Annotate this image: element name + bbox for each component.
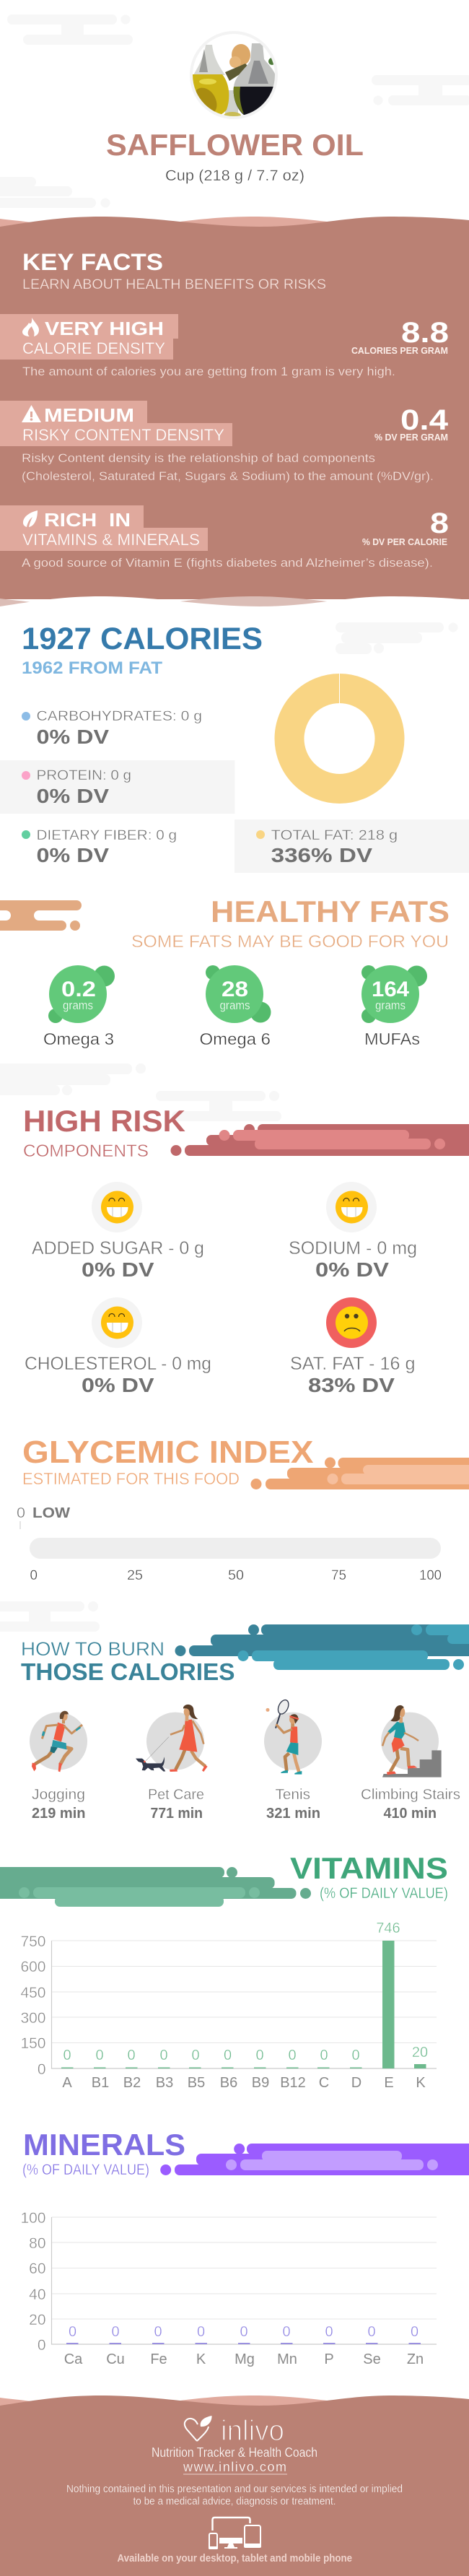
item: sodium: SODIUM - 0 mg xyxy=(289,1238,417,1258)
bar chart: vitamins: B6 xyxy=(220,2075,237,2091)
bar chart: vitamins: B3 xyxy=(156,2075,173,2091)
bar chart: vitamins: B1 xyxy=(92,2075,109,2091)
gauge scale: 25 xyxy=(127,1568,143,1583)
fact: vitamins and minerals: A good source of Vitamin E (fights diabetes and Alzheimer’s disease). xyxy=(22,556,433,570)
disclaimer xyxy=(66,2484,403,2507)
panel: healthy fats xyxy=(0,895,450,1048)
gauge scale: 100 xyxy=(419,1568,442,1583)
bar chart: minerals: 0 xyxy=(325,2324,333,2340)
icon: warning triangle xyxy=(22,405,41,422)
decorative streak: orange xyxy=(0,900,82,931)
bar chart: vitamins: 750 xyxy=(20,1933,46,1950)
legend: carbohydrates xyxy=(22,709,202,748)
item: added sugar xyxy=(32,1182,204,1281)
legend bands xyxy=(0,760,469,873)
marker: value 0 low: LOW xyxy=(32,1505,70,1521)
panel: footer xyxy=(0,2396,469,2576)
fact: vitamins and minerals xyxy=(0,505,449,570)
subheading: daily value: (% OF DAILY VALUE) xyxy=(22,2162,149,2178)
legend: total fat: 336% DV xyxy=(271,844,372,866)
background clouds xyxy=(0,14,469,1632)
bar chart: minerals: Ca xyxy=(64,2351,83,2367)
fact: risky content density: RISKY CONTENT DENSITY xyxy=(22,426,224,444)
bar chart: vitamins: C xyxy=(319,2075,329,2091)
bar chart: vitamins: B5 xyxy=(188,2075,205,2091)
bar chart: vitamins: K xyxy=(416,2075,426,2091)
bubble: omega 6: Omega 6 xyxy=(199,1030,271,1048)
bar chart: minerals: 0 xyxy=(38,2337,46,2354)
bar chart: minerals: 60 xyxy=(29,2260,46,2277)
fact: vitamins and minerals: 8 xyxy=(430,508,449,539)
disclaimer: to be a medical advice, diagnosis or treatment. xyxy=(133,2496,336,2507)
disclaimer: Nothing contained in this presentation and our services is intended or implied xyxy=(66,2484,403,2495)
heading: those calories: THOSE CALORIES xyxy=(21,1658,235,1685)
bar chart: vitamins: 0 xyxy=(127,2048,136,2063)
fact: calorie density: The amount of calories you are getting from 1 gram is very high. xyxy=(22,365,395,378)
legend: protein: PROTEIN: 0 g xyxy=(36,768,131,783)
tagline: Nutrition Tracker & Health Coach xyxy=(152,2445,317,2460)
item: added sugar: 0% DV xyxy=(82,1258,154,1281)
activity: jogging: Jogging xyxy=(32,1787,85,1803)
bar chart: minerals: Se xyxy=(363,2351,381,2367)
fact: calorie density: CALORIES PER GRAM xyxy=(351,346,448,356)
activity: tennis xyxy=(264,1698,322,1822)
decorative streak: red xyxy=(170,1124,469,1156)
bar chart: minerals xyxy=(20,2210,437,2367)
fact: risky content density: 0.4 xyxy=(400,404,449,436)
bar chart: minerals: 20 xyxy=(29,2312,46,2328)
fact: vitamins and minerals: RICH IN xyxy=(44,509,131,531)
marker: value 0 low xyxy=(17,1505,70,1529)
fact: calorie density: CALORIE DENSITY xyxy=(22,339,165,357)
bar chart: vitamins: 300 xyxy=(20,2010,46,2027)
bar chart: minerals: 0 xyxy=(111,2324,120,2340)
bar chart: vitamins: 0 xyxy=(288,2048,297,2063)
bar chart: vitamins: D xyxy=(351,2075,361,2091)
bar chart: vitamins: 0 xyxy=(320,2048,328,2063)
fact: risky content density xyxy=(0,401,449,483)
bar chart: vitamins: 450 xyxy=(20,1985,46,2001)
legend: total fat: TOTAL FAT: 218 g xyxy=(271,828,398,843)
bar chart: vitamins: B9 xyxy=(252,2075,269,2091)
heading: calories: 1927 CALORIES xyxy=(22,622,263,656)
legend: protein: 0% DV xyxy=(36,785,109,807)
subheading: from fat: 1962 FROM FAT xyxy=(22,658,162,678)
bar chart: minerals: 40 xyxy=(29,2286,46,2303)
fact: vitamins and minerals: % DV PER CALORIE xyxy=(362,537,447,547)
panel: glycemic index xyxy=(17,1435,469,1583)
bar chart: minerals: P xyxy=(324,2351,334,2367)
heading: high risk: HIGH RISK xyxy=(23,1104,185,1138)
bar chart: vitamins: 600 xyxy=(20,1959,46,1975)
bar chart: minerals: 0 xyxy=(367,2324,376,2340)
item: saturated fat: 83% DV xyxy=(308,1374,395,1396)
item: sodium: 0% DV xyxy=(315,1258,389,1281)
fact: risky content density: % DV PER GRAM xyxy=(374,432,448,443)
gauge bar xyxy=(30,1538,441,1559)
icon: devices xyxy=(209,2518,261,2549)
activity: climbing stairs xyxy=(361,1705,460,1822)
donut chart xyxy=(289,674,390,788)
panel: high risk components xyxy=(23,1104,469,1396)
item: cholesterol: CHOLESTEROL - 0 mg xyxy=(25,1354,211,1374)
heading: minerals: MINERALS xyxy=(23,2128,185,2162)
icon: tennis player xyxy=(264,1698,322,1775)
activity: pet care: Pet Care xyxy=(148,1787,204,1803)
legend: total fat xyxy=(256,828,398,866)
bar chart: minerals: Zn xyxy=(407,2351,424,2367)
bar chart: minerals: 0 xyxy=(240,2324,248,2340)
bar chart: vitamins: 150 xyxy=(20,2035,46,2052)
marker: value 0 low: 0 xyxy=(17,1505,25,1521)
fact: calorie density: 8.8 xyxy=(401,317,449,349)
bar chart: vitamins: A xyxy=(62,2075,72,2091)
bubble: MUFAs: MUFAs xyxy=(364,1030,420,1048)
activity: jogging: 219 min xyxy=(32,1806,85,1822)
bubble: omega 3: 0.2 xyxy=(61,978,96,1001)
legend: protein xyxy=(22,768,131,807)
item: sodium xyxy=(289,1182,417,1281)
bar chart: vitamins: 0 xyxy=(95,2048,104,2063)
fact: calorie density: VERY HIGH xyxy=(45,318,164,339)
item: added sugar: ADDED SUGAR - 0 g xyxy=(32,1238,204,1258)
panel: calories xyxy=(0,622,469,873)
activity: climbing stairs: Climbing Stairs xyxy=(361,1787,460,1803)
panel: minerals xyxy=(20,2128,469,2367)
activity: pet care xyxy=(136,1705,208,1822)
bubble: omega 3: Omega 3 xyxy=(43,1030,114,1048)
heading: how to burn: HOW TO BURN xyxy=(21,1638,165,1660)
legend: dietary fiber xyxy=(22,828,177,866)
heading: vitamins: VITAMINS xyxy=(290,1851,448,1885)
gauge scale: 0 xyxy=(30,1568,38,1583)
panel: key facts xyxy=(0,217,469,621)
decorative streak: teal xyxy=(175,1624,469,1670)
bar chart: vitamins: 0 xyxy=(191,2048,200,2063)
subheading: estimated: ESTIMATED FOR THIS FOOD xyxy=(22,1469,240,1488)
bubble: MUFAs: 164 xyxy=(372,978,409,1001)
item: saturated fat xyxy=(290,1297,416,1396)
bar chart: vitamins: B2 xyxy=(123,2075,141,2091)
bubble: omega 6: grams xyxy=(219,998,250,1012)
fact: calorie density xyxy=(0,314,449,378)
bar chart: vitamins: 20 xyxy=(412,2045,428,2061)
icon: flame xyxy=(22,318,39,336)
bar chart: minerals: Mg xyxy=(234,2351,255,2367)
bar chart: minerals: Mn xyxy=(277,2351,297,2367)
bar chart: vitamins: 0 xyxy=(224,2048,232,2063)
activity: jogging xyxy=(30,1711,87,1822)
legend: carbohydrates: 0% DV xyxy=(36,726,109,748)
legend: carbohydrates: CARBOHYDRATES: 0 g xyxy=(36,709,202,724)
logo wordmark: inlivo xyxy=(221,2415,284,2447)
bar chart: minerals: 0 xyxy=(154,2324,162,2340)
heading: glycemic index: GLYCEMIC INDEX xyxy=(22,1435,314,1470)
bar chart: minerals: 0 xyxy=(197,2324,205,2340)
fact: risky content density: MEDIUM xyxy=(44,404,134,426)
gauge scale: 75 xyxy=(331,1568,346,1583)
bar chart: minerals: Fe xyxy=(150,2351,167,2367)
subheading: LEARN ABOUT HEALTH BENEFITS OR RISKS xyxy=(22,277,326,292)
bubble: MUFAs: grams xyxy=(375,998,406,1012)
bar chart: minerals: 80 xyxy=(29,2235,46,2252)
bubble: omega 3: grams xyxy=(63,998,93,1012)
title: SAFFLOWER OIL xyxy=(106,128,364,162)
bar chart: vitamins: B12 xyxy=(280,2075,306,2091)
decorative streak: green xyxy=(0,1867,311,1907)
heading: healthy fats: HEALTHY FATS xyxy=(211,895,450,928)
bubble: omega 6: 28 xyxy=(222,978,248,1001)
icon: jogger xyxy=(30,1711,87,1772)
decorative streak: purple xyxy=(160,2144,469,2175)
fact: risky content density: Risky Content density is the relationship of bad components xyxy=(22,451,375,465)
bar chart: minerals: 0 xyxy=(411,2324,418,2340)
bar chart: vitamins: 0 xyxy=(38,2061,46,2078)
bar chart: minerals: 0 xyxy=(282,2324,291,2340)
bar chart: vitamins: 0 xyxy=(63,2048,71,2063)
website link: www.inlivo.com xyxy=(183,2460,286,2474)
serving size: Cup (218 g / 7.7 oz) xyxy=(165,167,304,184)
bar chart: minerals: 0 xyxy=(69,2324,76,2340)
icon: woman walking dog xyxy=(136,1705,208,1772)
activity: tennis: 321 min xyxy=(266,1806,320,1822)
food photo: oil bottles xyxy=(190,31,279,119)
panel: vitamins xyxy=(0,1851,448,2091)
gauge scale: 50 xyxy=(228,1568,244,1583)
activity: climbing stairs: 410 min xyxy=(384,1806,437,1822)
subheading: SOME FATS MAY BE GOOD FOR YOU xyxy=(131,932,449,952)
bar chart: vitamins: 0 xyxy=(255,2048,264,2063)
bar chart: minerals: K xyxy=(196,2351,206,2367)
item: cholesterol xyxy=(25,1297,211,1396)
heading: key facts: KEY FACTS xyxy=(22,249,163,275)
icon: leaf xyxy=(23,510,38,527)
bubble: omega 6 xyxy=(199,965,271,1048)
bar chart: minerals: 100 xyxy=(20,2210,46,2227)
icon: woman climbing stairs xyxy=(381,1705,442,1777)
legend: dietary fiber: 0% DV xyxy=(36,844,109,866)
activity: tennis: Tenis xyxy=(276,1787,310,1803)
subheading: components: COMPONENTS xyxy=(23,1141,149,1161)
bubble: omega 3 xyxy=(43,965,115,1048)
subheading: daily value: (% OF DAILY VALUE) xyxy=(320,1885,448,1902)
bar chart: vitamins: E xyxy=(384,2075,394,2091)
activity: pet care: 771 min xyxy=(150,1806,203,1822)
gauge scale xyxy=(30,1568,442,1583)
bar chart: vitamins xyxy=(20,1920,437,2091)
bar chart: vitamins: 746 xyxy=(376,1920,400,1936)
availability note: Available on your desktop, tablet and mobile phone xyxy=(117,2552,352,2564)
item: saturated fat: SAT. FAT - 16 g xyxy=(290,1354,416,1374)
item: cholesterol: 0% DV xyxy=(82,1374,154,1396)
bar chart: vitamins: 0 xyxy=(351,2048,360,2063)
decorative streak: orange xyxy=(251,1457,469,1489)
bar chart: vitamins: 0 xyxy=(159,2048,168,2063)
bar chart: minerals: Cu xyxy=(106,2351,125,2367)
fact: vitamins and minerals: VITAMINS & MINERALS xyxy=(22,531,200,549)
logo: heart and leaf xyxy=(185,2416,212,2441)
legend: dietary fiber: DIETARY FIBER: 0 g xyxy=(36,828,177,843)
fact: risky content density: (Cholesterol, Saturated Fat, Sugars & Sodium) to the amount (%DV/gr). xyxy=(22,469,434,483)
panel: burn calories xyxy=(21,1624,469,1822)
bubble: MUFAs xyxy=(361,965,427,1048)
